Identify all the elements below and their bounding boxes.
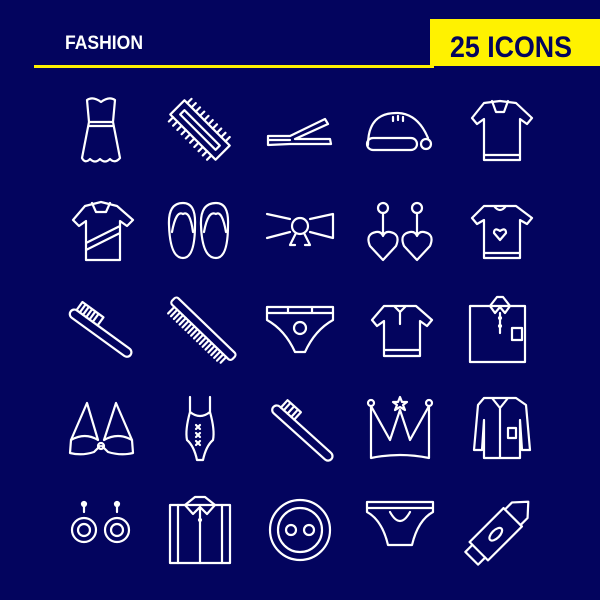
icon: button bbox=[270, 500, 330, 560]
icon: hair brush bbox=[68, 300, 139, 359]
icon: flip flops bbox=[169, 203, 228, 258]
badge: 25 icons bbox=[430, 19, 600, 66]
icon: toothbrush bbox=[270, 396, 341, 462]
icon: lipstick tube bbox=[463, 493, 537, 567]
icon: hoop earrings bbox=[72, 502, 129, 542]
icon: hair clip bbox=[268, 119, 331, 145]
icon: shirt diagonal bbox=[73, 202, 133, 260]
icon: bra bbox=[70, 403, 133, 454]
icon: heart earrings bbox=[368, 203, 432, 260]
icon: folded polo bbox=[470, 297, 525, 362]
icon: polo shirt bbox=[472, 101, 532, 160]
icon: briefs bbox=[367, 502, 433, 545]
icon: hat bbox=[367, 113, 431, 150]
icon: long sleeve shirt bbox=[474, 398, 530, 458]
icon: underwear bbox=[267, 307, 333, 352]
icon: dress bbox=[82, 98, 120, 162]
icon: henley shirt bbox=[372, 306, 432, 356]
icon: comb 2 bbox=[164, 296, 237, 368]
badge: 25 icons: 25 ICONS bbox=[450, 31, 572, 64]
icon: folded shirt bbox=[170, 497, 230, 563]
icon: comb bbox=[166, 96, 234, 164]
icon: heart tshirt bbox=[472, 206, 532, 258]
icon: bow bbox=[267, 214, 333, 245]
icon: swimsuit bbox=[186, 397, 214, 460]
header line bbox=[34, 65, 434, 68]
icon: crown bbox=[368, 397, 432, 458]
title: FASHION bbox=[65, 33, 143, 54]
